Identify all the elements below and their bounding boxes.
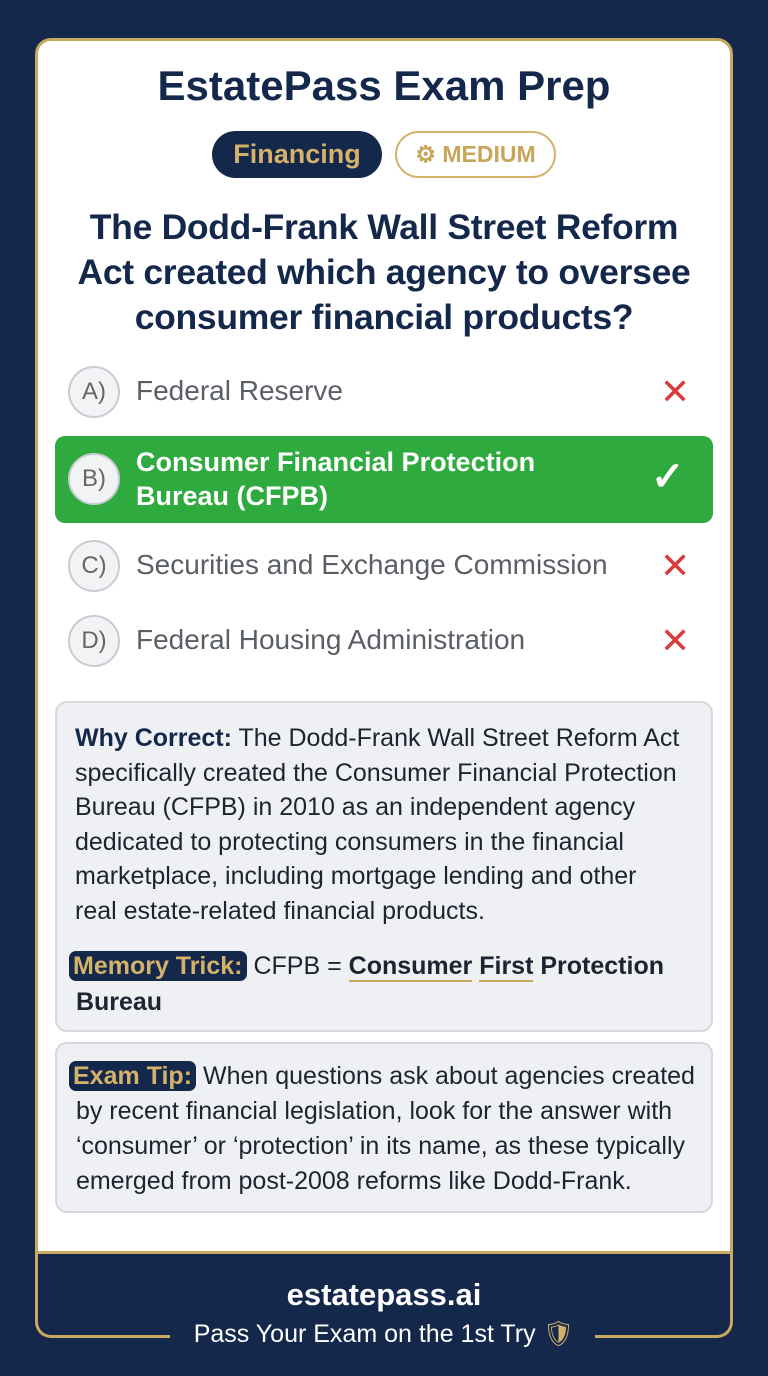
explanation text: marketplace, including mortgage lending and other [75,862,636,890]
panel: exam tip: Exam Tip: When questions ask about agencies created [73,1062,695,1090]
panel: exam tip: by recent financial legislation, look for the answer with [76,1097,672,1125]
option D [68,615,690,667]
question: The Dodd-Frank Wall Street Reform [90,207,678,247]
question: Act created which agency to oversee [78,252,690,292]
memory trick: Bureau [76,988,162,1016]
option C [68,540,690,592]
panel: why correct [55,701,713,1032]
option B correct: ✓ [651,455,685,499]
option A [68,366,690,418]
pill: difficulty: ⚙ MEDIUM [415,141,536,167]
explanation text: Bureau (CFPB) in 2010 as an independent agency [75,793,635,821]
option C: Securities and Exchange Commission [136,549,608,580]
option C: C) [81,552,107,579]
explanation text: dedicated to protecting consumers in the financial [75,828,624,856]
panel: exam tip [55,1042,713,1213]
memory trick: Memory Trick: CFPB = Consumer First Protection [73,952,664,980]
option B correct: Bureau (CFPB) [136,481,328,511]
explanation text [75,724,680,924]
option B correct: B) [82,465,106,492]
explanation text: specifically created the Consumer Financial Protection [75,758,677,786]
option D: Federal Housing Administration [136,624,525,655]
question [78,207,690,337]
option A: A) [82,378,106,405]
option D: D) [81,627,107,654]
footer frame [35,1254,733,1338]
pill: difficulty [395,131,556,178]
option A: ✕ [660,371,690,412]
footer gap mask [170,1320,595,1350]
option B correct: Consumer Financial Protection [136,447,535,477]
footer tagline: Pass Your Exam on the 1st Try 🛡 [194,1320,574,1348]
pill: category: Financing [233,139,361,169]
panel: exam tip: ‘consumer’ or ‘protection’ in its name, as these typically [76,1132,685,1160]
option D: ✕ [660,620,690,661]
option C: ✕ [660,545,690,586]
option A: Federal Reserve [136,375,343,406]
footer brand: estatepass.ai [287,1277,481,1312]
title: EstatePass Exam Prep [158,62,610,109]
explanation text: Why Correct: The Dodd-Frank Wall Street Reform Act [75,724,679,752]
explanation text: real estate-related financial products. [75,896,485,924]
pill: category [212,131,382,178]
option B correct [55,436,713,523]
panel: exam tip: emerged from post-2008 reforms like Dodd-Frank. [76,1167,632,1195]
question: consumer financial products? [135,297,633,337]
memory trick [69,951,664,1016]
